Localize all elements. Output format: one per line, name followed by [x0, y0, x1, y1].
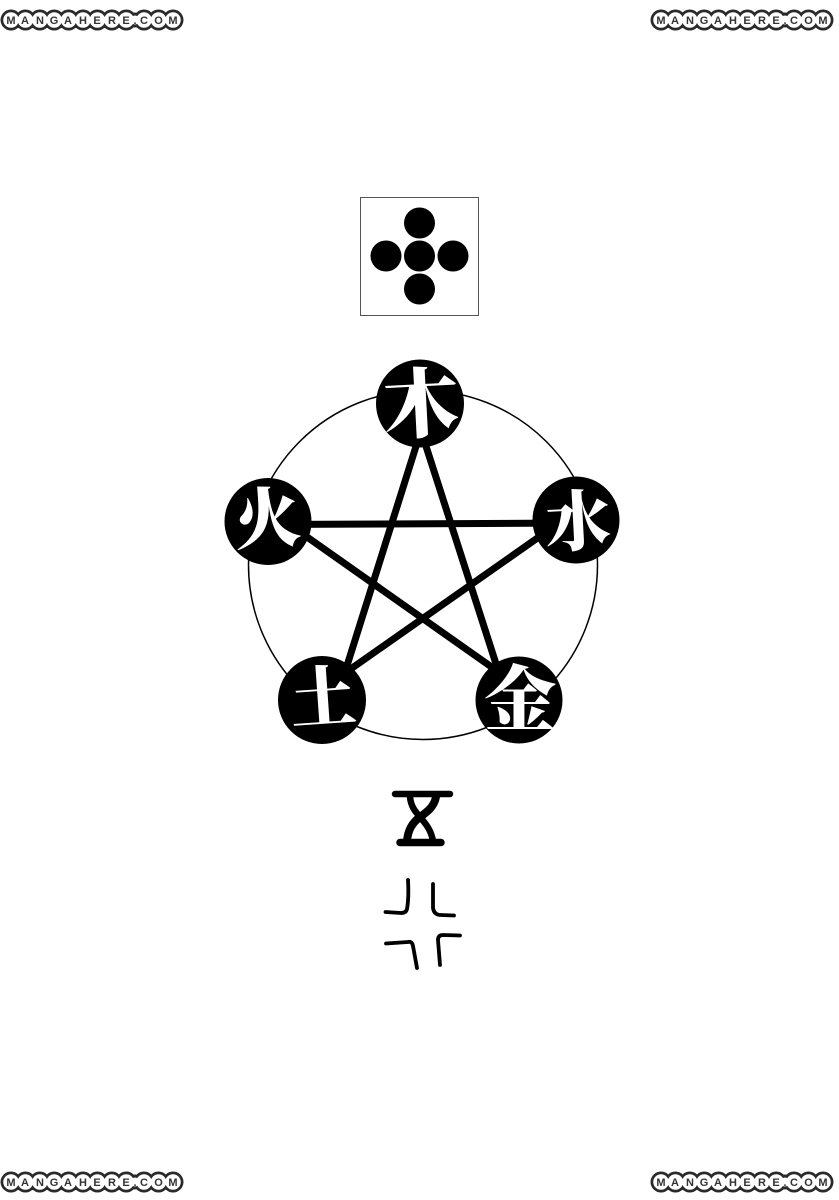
element: earth: 土	[287, 643, 359, 742]
icon: hourglass glyph	[395, 794, 450, 842]
element: water: 水	[542, 467, 613, 566]
watermark: top left: MANGAHERE.COM	[6, 15, 178, 27]
outer ring	[248, 390, 598, 740]
element: metal: 金	[484, 642, 556, 746]
element: wood: 木	[380, 342, 462, 455]
star lines	[268, 440, 576, 680]
watermark: top right: MANGAHERE.COM	[656, 15, 828, 27]
element: fire: 火	[231, 464, 303, 563]
chart: five elements pentagram	[224, 342, 620, 746]
watermark: bottom right: MANGAHERE.COM	[656, 1177, 828, 1189]
icon: converging corner marks	[386, 880, 460, 968]
icon: five dots crest in square	[360, 198, 478, 316]
watermark: bottom left: MANGAHERE.COM	[6, 1177, 178, 1189]
